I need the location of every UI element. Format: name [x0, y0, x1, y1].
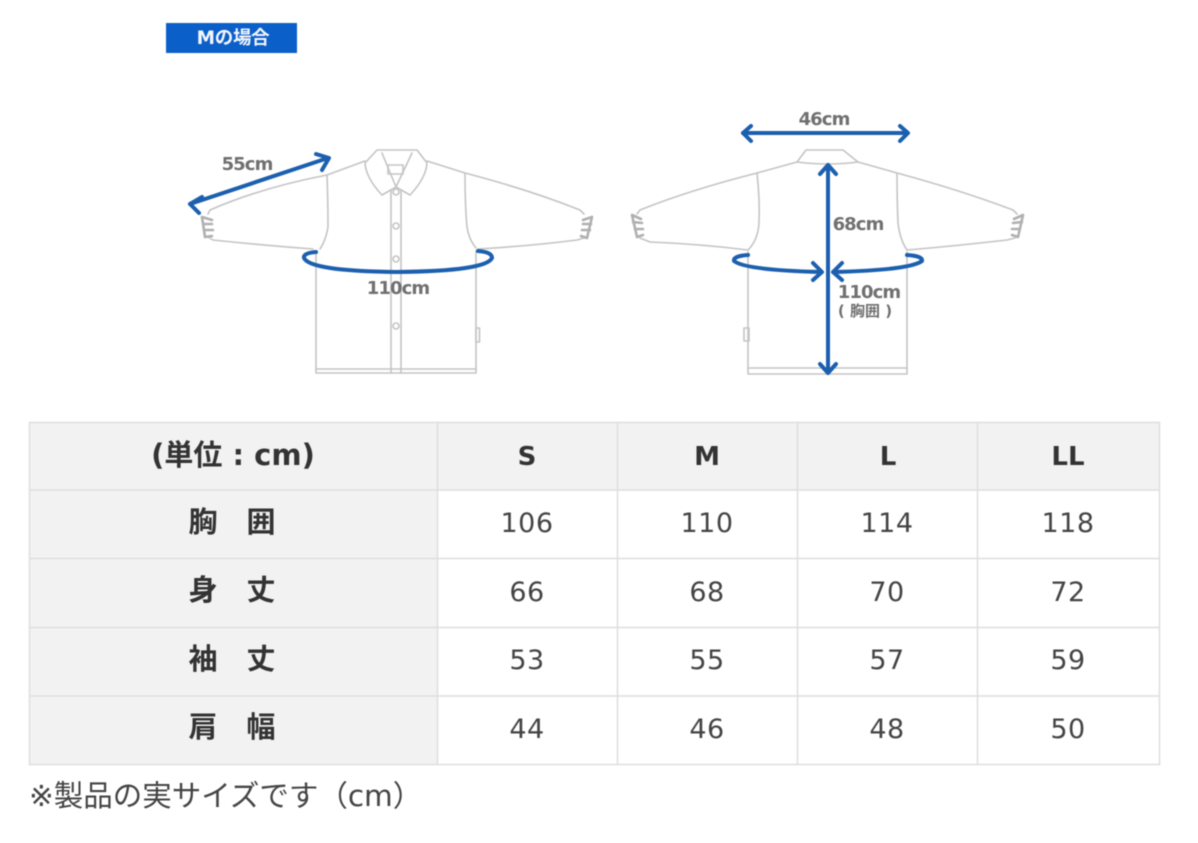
size table — [29, 422, 1160, 765]
row: body length: 72 — [1050, 577, 1086, 608]
cuffs — [632, 215, 1023, 237]
row: sleeve length: 55 — [689, 645, 725, 676]
row: sleeve length: 53 — [509, 645, 545, 676]
label: 55cm: 55cm — [222, 154, 273, 175]
row: shoulder width: 肩 幅 — [188, 710, 276, 744]
row: chest: 110 — [680, 508, 734, 539]
arrow: body length — [820, 165, 836, 373]
row: shoulder width: 50 — [1050, 714, 1086, 745]
table header row: LL — [1051, 442, 1085, 472]
curved arrow: chest back right — [833, 255, 922, 280]
row: body length: 身 丈 — [188, 573, 276, 607]
size badge: Mの場合 — [166, 23, 297, 53]
shirt front outline — [202, 150, 592, 373]
arrow: sleeve length — [190, 154, 329, 213]
row: shoulder width: 44 — [509, 714, 545, 745]
label: 110cm back: 110cm — [838, 282, 900, 303]
size badge: Mの場合: Mの場合 — [197, 28, 270, 49]
row: chest: 106 — [500, 508, 554, 539]
label: 46cm: 46cm — [799, 109, 850, 130]
table shaded cells — [29, 422, 1160, 765]
row: shoulder width — [188, 710, 1086, 745]
row: body length: 66 — [509, 577, 545, 608]
row: sleeve length: 59 — [1050, 645, 1086, 676]
table header row — [151, 438, 1085, 472]
label: chest note: ( 胸囲 ) — [838, 302, 892, 320]
table header row: S — [518, 442, 536, 472]
row: chest: 114 — [860, 508, 914, 539]
row: chest: 118 — [1041, 508, 1095, 539]
table grid — [29, 422, 1160, 765]
arrow: shoulder width — [743, 126, 908, 141]
footnote: ※製品の実サイズです（cm） — [29, 779, 422, 813]
row: sleeve length: 袖 丈 — [188, 642, 276, 676]
front shirt diagram — [190, 150, 592, 373]
row: sleeve length: 57 — [869, 645, 905, 676]
table header row: M — [694, 442, 720, 472]
back shirt diagram — [632, 109, 1023, 374]
row: chest: 胸 囲 — [188, 505, 276, 539]
row: body length: 70 — [869, 577, 905, 608]
label: 110cm front: 110cm — [367, 278, 429, 299]
curve: chest front — [304, 251, 492, 272]
row: shoulder width: 48 — [869, 714, 905, 745]
curved arrow: chest back left — [734, 255, 822, 280]
cuffs — [202, 217, 592, 238]
row: body length — [188, 573, 1086, 608]
table header row: (単位 : cm) — [151, 438, 315, 472]
row: shoulder width: 46 — [689, 714, 725, 745]
label: 68cm: 68cm — [833, 214, 884, 235]
table header row: L — [880, 442, 896, 472]
shirt back outline — [632, 150, 1023, 374]
row: sleeve length — [188, 642, 1086, 676]
row: body length: 68 — [689, 577, 725, 608]
row: chest — [188, 505, 1095, 539]
